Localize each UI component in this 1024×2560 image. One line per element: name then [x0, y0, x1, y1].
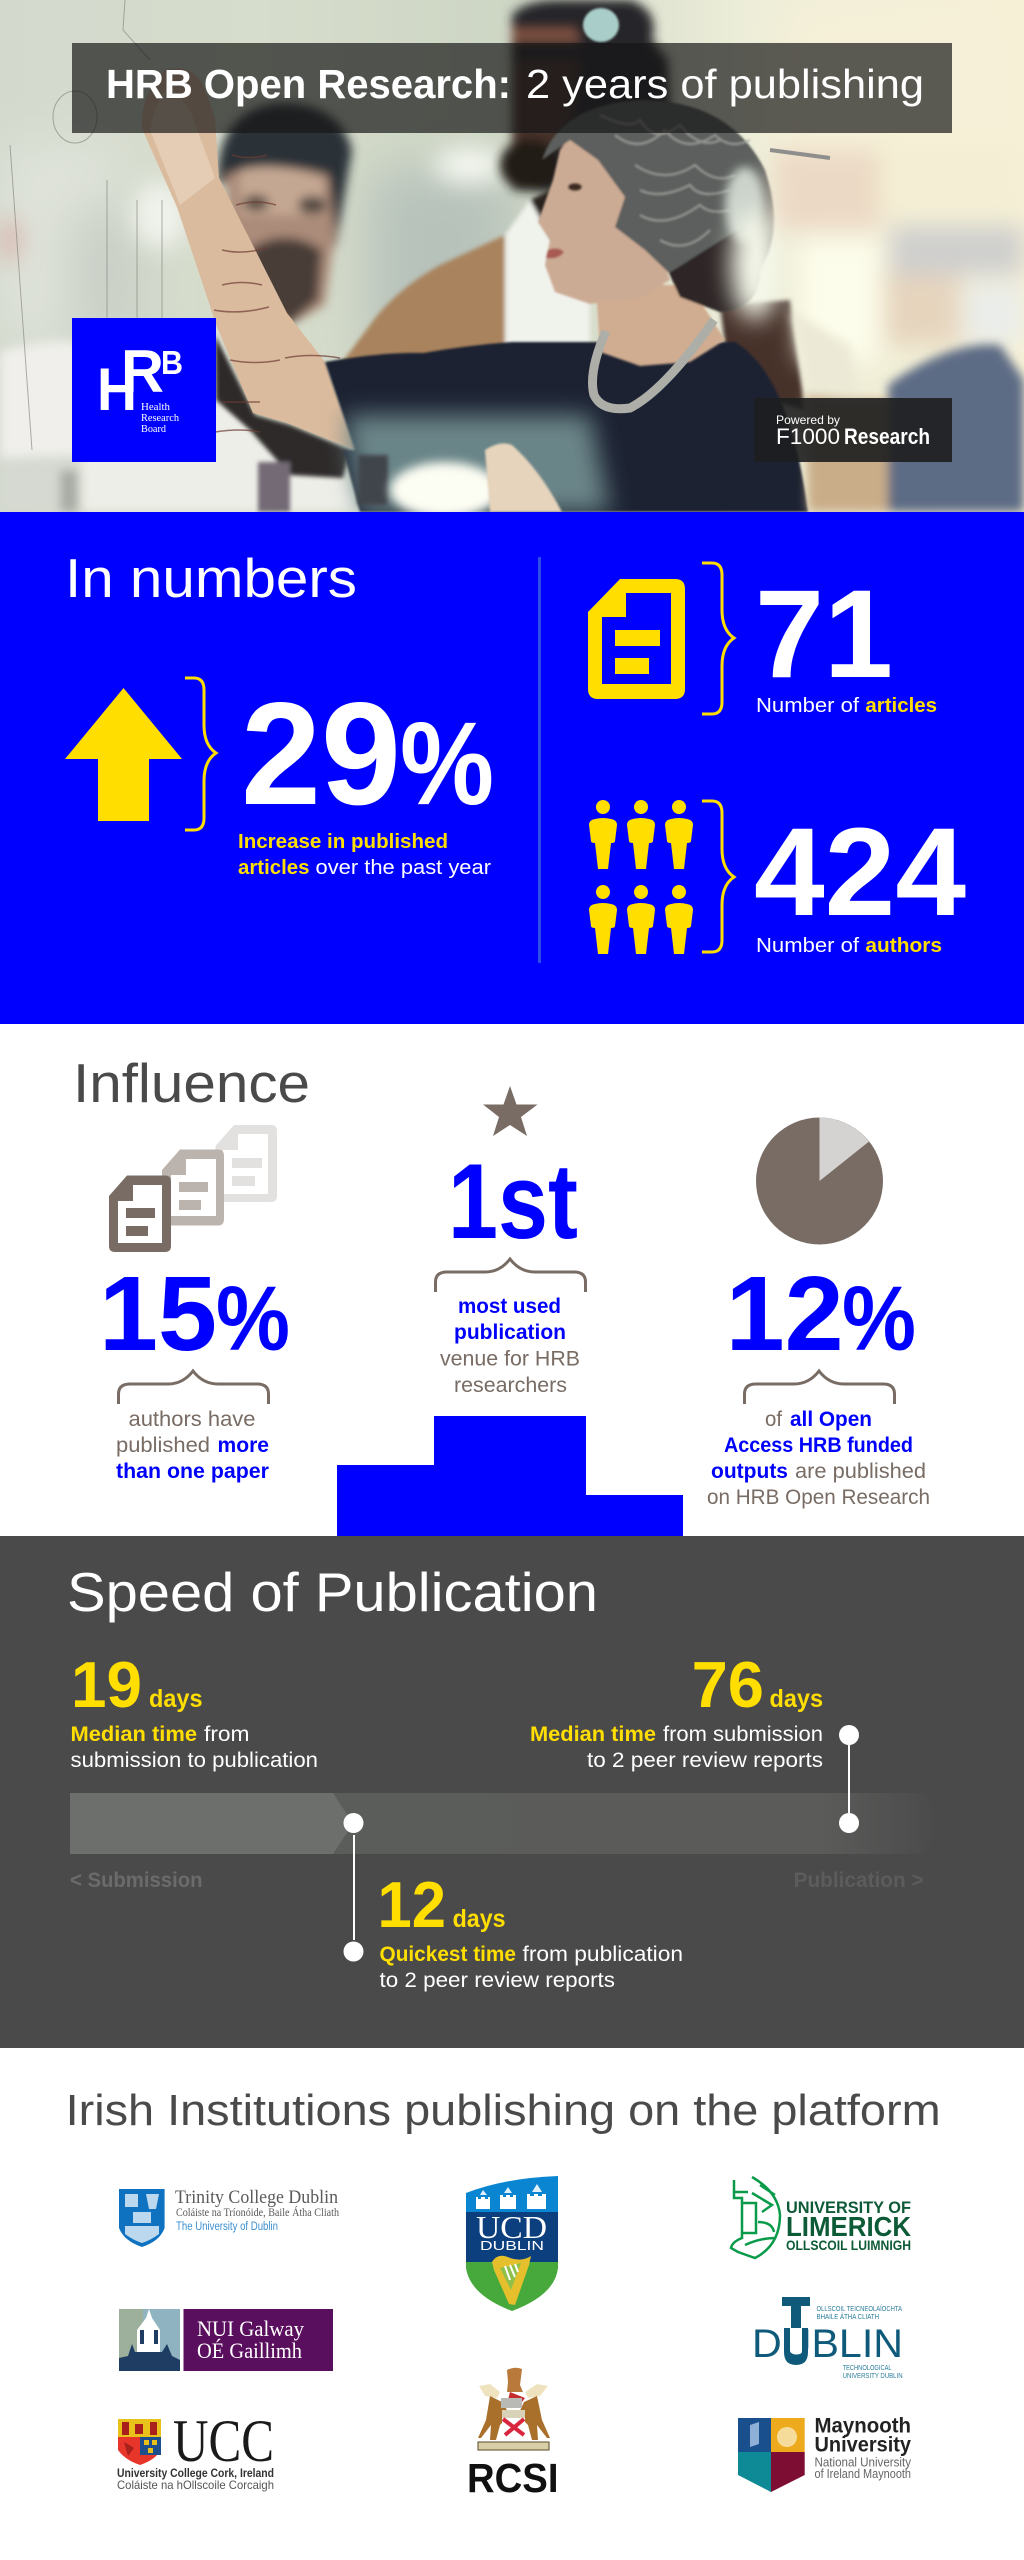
logo: Maynooth University: Maynooth [814, 2414, 911, 2438]
logo: TU Dublin [752, 2297, 903, 2380]
stat: 424 authors: 424 [754, 803, 966, 942]
logo: Health Research Board [72, 318, 216, 462]
caption: authors with more than one paper: authors have [128, 1408, 256, 1431]
logo: UCC: University College Cork, Ireland [117, 2466, 274, 2480]
panel: irish institutions [0, 2048, 1024, 2560]
logo: UCD Dublin: UCD [476, 2209, 547, 2245]
caption: all open access outputs [707, 1408, 930, 1509]
logo: Trinity College Dublin [119, 2187, 339, 2247]
icon: article document [588, 579, 685, 699]
caption: most used publication venue: researchers [454, 1374, 567, 1397]
title bar [72, 43, 952, 133]
logo: Maynooth University: of Ireland Maynooth [814, 2466, 911, 2481]
caption: most used publication venue: venue for HRB [440, 1348, 580, 1370]
caption: number of articles: articles [865, 694, 937, 717]
caption: authors with more than one paper [116, 1408, 269, 1483]
caption: authors with more than one paper: more [218, 1434, 269, 1457]
timeline bar [70, 1793, 940, 1854]
icon: star [483, 1086, 538, 1136]
text: median time to reviews: from submission [663, 1723, 823, 1746]
stat: 1st: 1st [448, 1141, 578, 1261]
caption: number of articles [756, 694, 937, 717]
stat: 12 days: 12 [378, 1868, 446, 1941]
logo: Maynooth University: National University [814, 2454, 911, 2470]
caption: increase in published articles: over the past year [316, 856, 491, 879]
podium [337, 1416, 683, 1536]
stat: 19 days: 19 [71, 1648, 142, 1721]
caption: all open access outputs: are published [795, 1460, 926, 1483]
title bar: HRB Open Research: [106, 61, 511, 107]
text: quickest time: from publication [522, 1943, 683, 1966]
brace: 15 percent [118, 1371, 268, 1404]
stat: 19 days [71, 1648, 202, 1721]
caption: increase in published articles: articles [238, 856, 310, 879]
logo: Health Research Board: R [121, 338, 164, 405]
stat: 76 days [692, 1648, 823, 1721]
logo: TU Dublin: OLLSCOIL TEICNEOLAÍOCHTA [816, 2304, 902, 2313]
logo: NUI Galway: OÉ Gaillimh [197, 2338, 302, 2363]
logo: University of Limerick [731, 2177, 911, 2258]
brace: articles [702, 563, 734, 714]
brace: 12 percent [744, 1371, 894, 1404]
logo: Health Research Board: B [161, 344, 183, 381]
title bar: 2 years of publishing [526, 61, 924, 107]
caption: all open access outputs: all Open [790, 1408, 872, 1431]
text: median time to reviews [530, 1723, 823, 1772]
logo: TU Dublin: BHAILE ÁTHA CLIATH [816, 2312, 879, 2321]
logo: University of Limerick: UNIVERSITY OF [786, 2198, 911, 2217]
caption: all open access outputs: outputs [711, 1460, 788, 1483]
text: median time to reviews: Median time [530, 1723, 656, 1746]
logo: UCD Dublin: DUBLIN [480, 2238, 544, 2253]
stat: 71 articles: 71 [755, 565, 893, 704]
logo: University of Limerick: OLLSCOIL LUIMNIGH [786, 2238, 911, 2253]
stat: 29 percent [241, 672, 494, 835]
brace: authors [702, 801, 734, 952]
stat: 12 percent: % [842, 1268, 916, 1370]
stat: 29 percent: % [400, 698, 494, 830]
photo: collaborators writing on glass [0, 0, 1024, 518]
heading: speed of publication: Speed of Publication [67, 1561, 598, 1623]
logo: NUI Galway: NUI Galway [197, 2316, 304, 2341]
logo: Trinity College Dublin: The University of Dublin [176, 2221, 278, 2233]
logo: Health Research Board: H [97, 356, 137, 423]
stat: 12 days [378, 1868, 506, 1941]
stat: 15 percent [99, 1255, 290, 1373]
logo: Health Research Board: Health [141, 401, 170, 413]
label: publication: Publication > [794, 1869, 924, 1892]
heading: irish institutions: Irish Institutions publishing on the platform [66, 2086, 941, 2135]
icon: six authors [589, 800, 693, 954]
caption: number of authors [756, 934, 942, 957]
caption: number of articles: Number of [756, 694, 859, 717]
stat: 12 days: days [453, 1905, 506, 1933]
caption: increase in published articles: Increase in published [238, 830, 448, 853]
brace: 1st [436, 1259, 586, 1292]
caption: number of authors: Number of [756, 934, 859, 957]
logo: UCC: UCC [173, 2408, 274, 2474]
text: median time to publication [70, 1723, 318, 1772]
logo: Maynooth University: University [814, 2434, 911, 2456]
text: median time to publication: from [204, 1723, 250, 1746]
brace: arrow [185, 678, 216, 830]
caption: authors with more than one paper: published [116, 1434, 210, 1457]
badge: Powered by F1000 Research: Powered by [776, 413, 840, 427]
logo: RCSI: RCSI [467, 2455, 558, 2501]
caption: authors with more than one paper: than one paper [116, 1460, 269, 1483]
badge: Powered by F1000 Research: Research [844, 424, 930, 449]
text: quickest time [380, 1943, 683, 1992]
stat: 12 percent [726, 1255, 916, 1373]
logo: Maynooth University [738, 2414, 911, 2492]
stat: 76 days: 76 [692, 1648, 764, 1721]
logo: Health Research Board: Board [141, 423, 166, 435]
caption: all open access outputs: on HRB Open Research [707, 1486, 930, 1509]
stat: 15 percent: 15 [99, 1255, 217, 1373]
caption: most used publication venue: most used [458, 1295, 561, 1318]
stat: 12 percent: 12 [726, 1255, 844, 1373]
logo: TU Dublin: DUBLIN [752, 2322, 903, 2366]
logo: Health Research Board: Research [141, 412, 179, 424]
text: median time to publication: submission to publication [70, 1749, 318, 1772]
logo: TU Dublin: TECHNOLOGICAL [843, 2363, 892, 2372]
text: median time to reviews: to 2 peer review reports [587, 1749, 823, 1772]
logo: Trinity College Dublin: Coláiste na Tríonóide, Baile Átha Cliath [176, 2205, 339, 2219]
heading: influence: Influence [73, 1052, 310, 1114]
logo: UCD Dublin [466, 2176, 558, 2311]
panel: hero photo header [0, 0, 1024, 518]
text: quickest time: Quickest time [380, 1943, 516, 1966]
caption: most used publication venue: publication [454, 1321, 566, 1344]
stat: 29 percent: 29 [241, 672, 401, 835]
stat: 76 days: days [770, 1685, 823, 1713]
text: median time to publication: Median time [70, 1723, 197, 1746]
panel: speed of publication [0, 1536, 1024, 2048]
text: quickest time: to 2 peer review reports [380, 1969, 615, 1992]
logo: UCC [117, 2408, 274, 2492]
logo: University of Limerick: LIMERICK [786, 2211, 911, 2242]
caption: all open access outputs: Access HRB funded [724, 1434, 913, 1457]
logo: RCSI [467, 2368, 558, 2501]
stat: 19 days: days [149, 1685, 202, 1713]
label: submission: < Submission [70, 1869, 202, 1892]
logo: Trinity College Dublin: Trinity College Dublin [175, 2187, 338, 2208]
caption: most used publication venue [440, 1295, 580, 1397]
badge: Powered by F1000 Research: F1000 [776, 424, 840, 449]
logo: UCC: Coláiste na hOllscoile Corcaigh [117, 2478, 274, 2492]
marker: 12 days [344, 1813, 364, 1962]
panel: influence [0, 1024, 1024, 1536]
forearm [142, 68, 355, 450]
heading: in numbers: In numbers [65, 547, 357, 609]
caption: all open access outputs: of [765, 1408, 782, 1431]
badge: Powered by F1000 Research [754, 398, 952, 462]
logo: NUI Galway [119, 2309, 333, 2371]
pie chart: 12 percent [756, 1118, 883, 1244]
panel: in numbers [0, 512, 1024, 1024]
caption: number of authors: authors [865, 934, 942, 957]
logo: TU Dublin: UNIVERSITY DUBLIN [843, 2371, 903, 2380]
icon: up arrow [65, 688, 182, 821]
marker: 76 days [839, 1725, 859, 1833]
caption: increase in published articles [238, 830, 491, 879]
icon: stacked documents [109, 1125, 277, 1252]
stat: 15 percent: % [216, 1268, 290, 1370]
